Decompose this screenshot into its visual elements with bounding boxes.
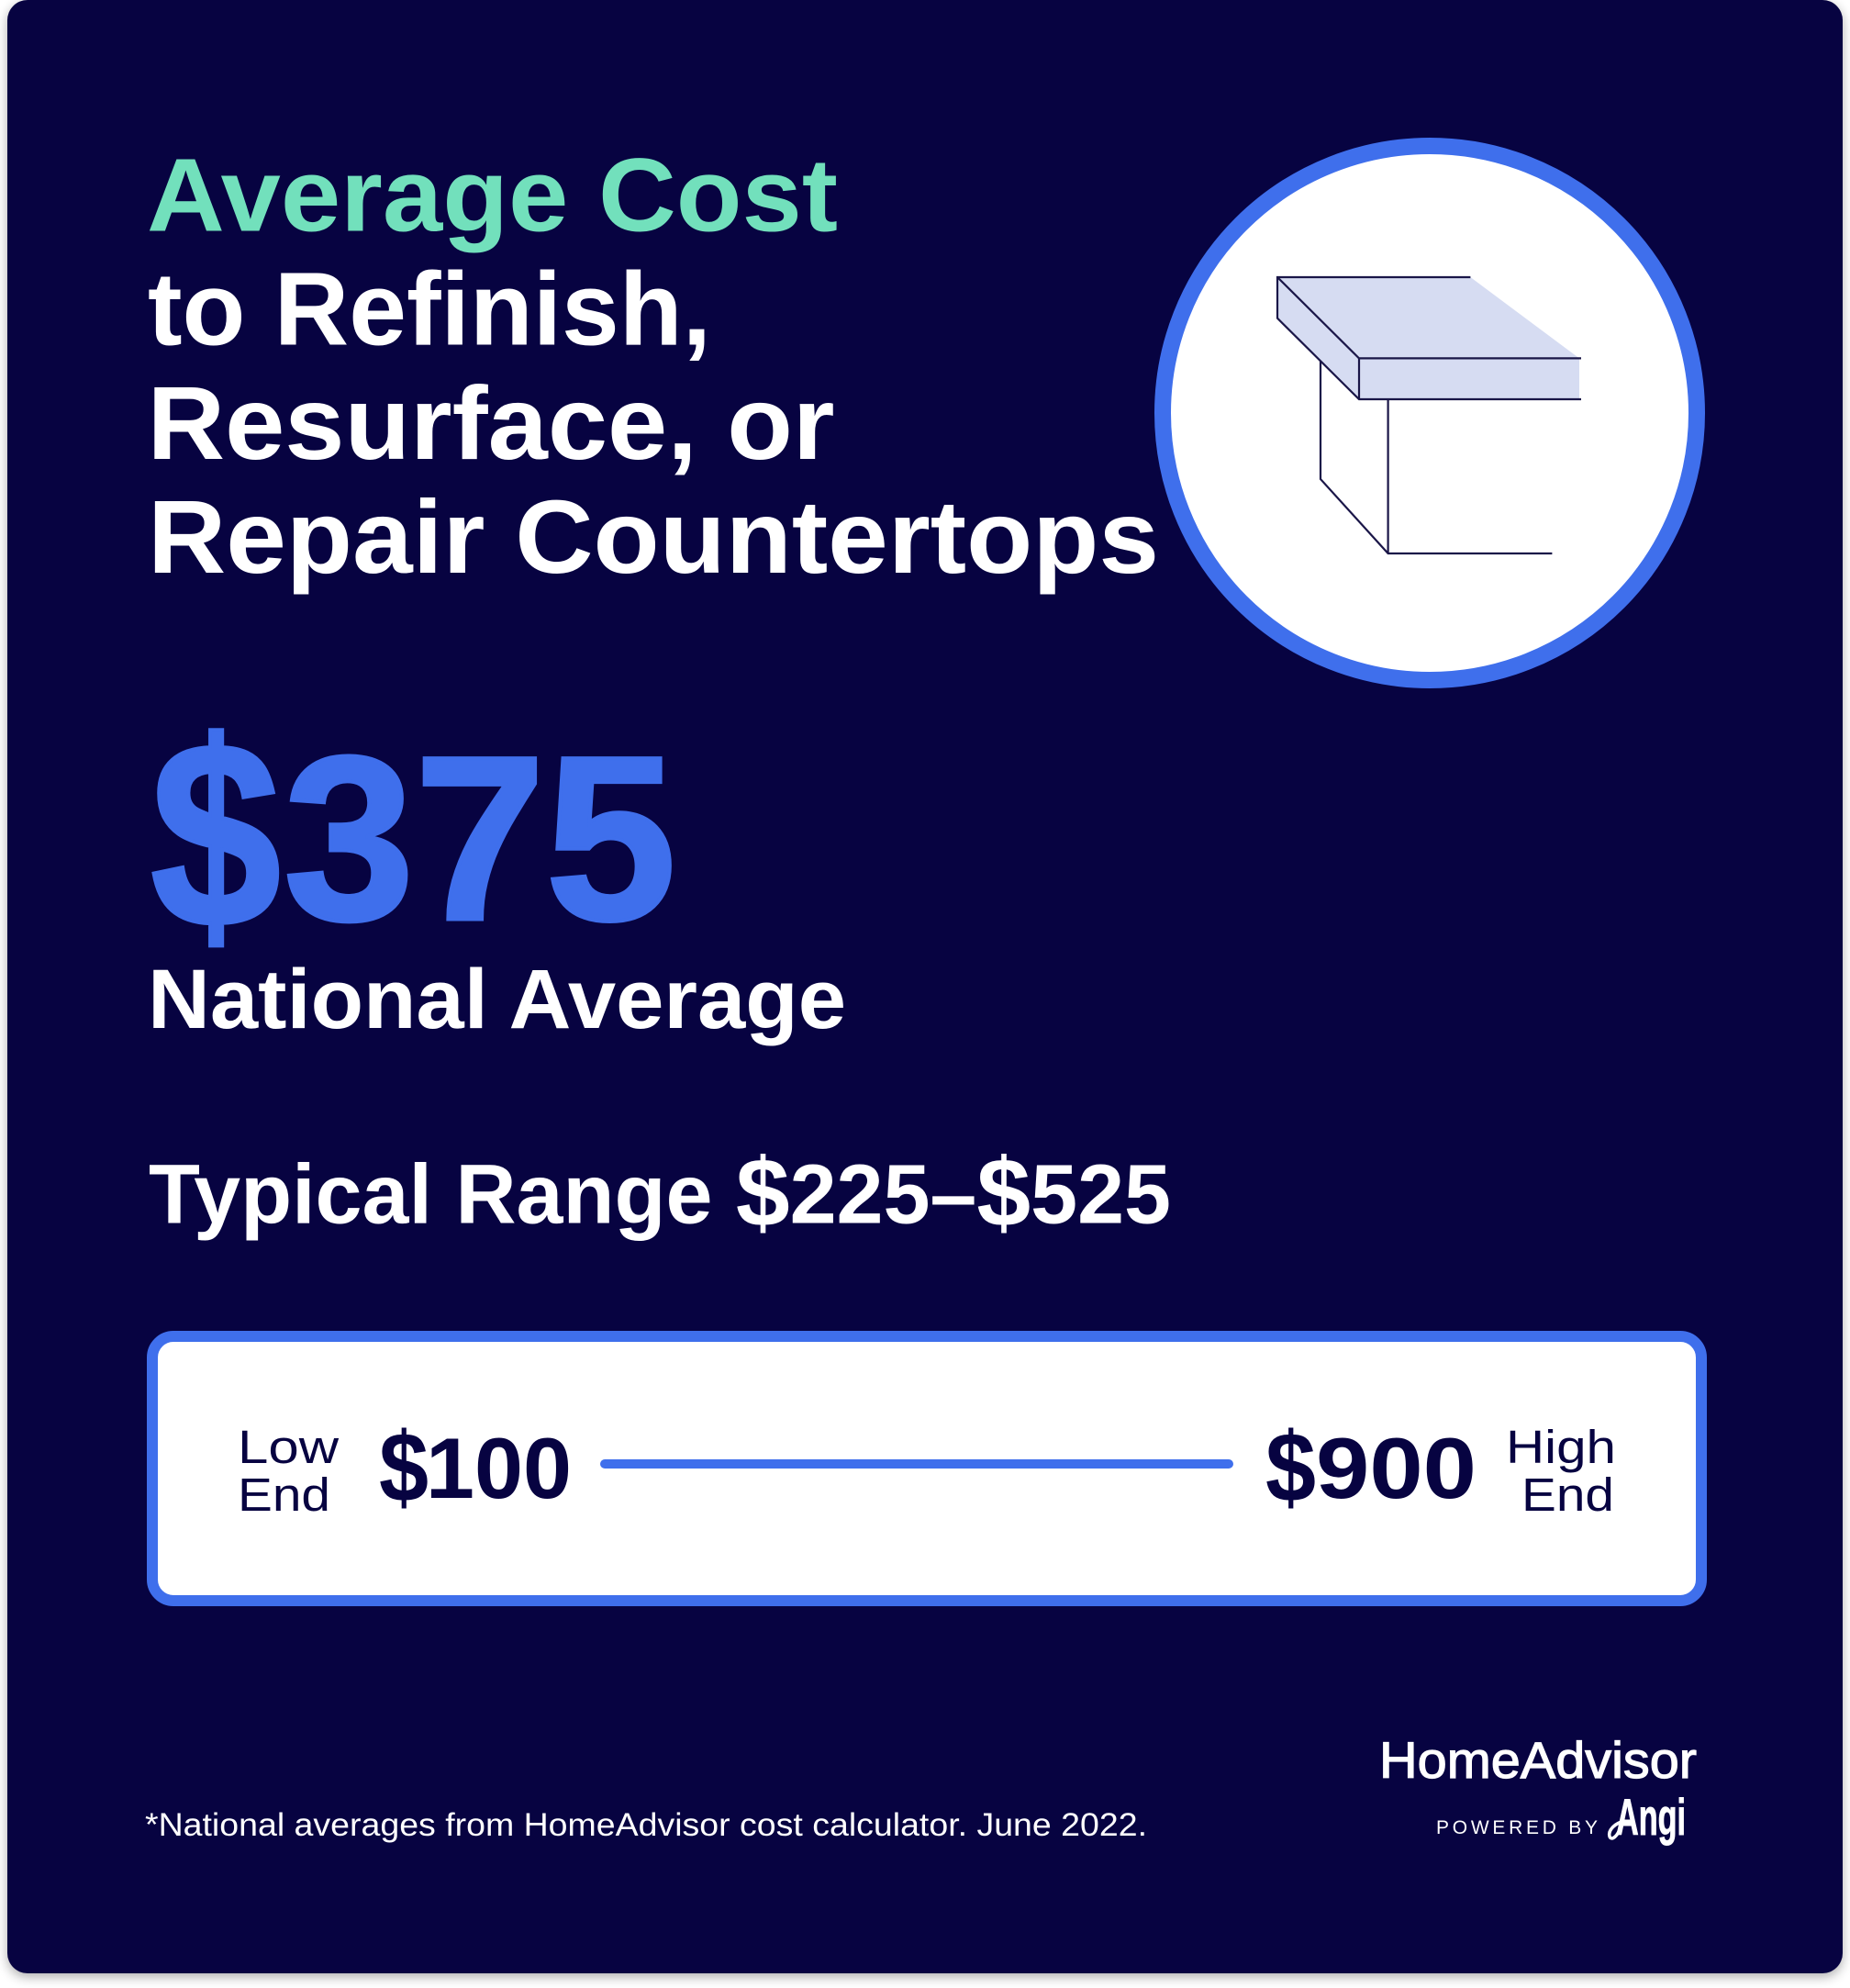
low end price: 100 bbox=[426, 1420, 572, 1516]
typical range: $ bbox=[976, 1138, 1031, 1246]
title: Resurface, or bbox=[147, 365, 835, 481]
low end price: $ bbox=[379, 1412, 429, 1522]
low end label bbox=[238, 1421, 339, 1521]
low end label: Low bbox=[238, 1421, 339, 1473]
low end label: End bbox=[238, 1469, 330, 1521]
logo: HomeAdvisor powered by Angi bbox=[1379, 1731, 1697, 1846]
icon: countertop in circle bbox=[1163, 146, 1697, 680]
title: to Refinish, bbox=[148, 251, 711, 367]
title bbox=[147, 138, 1159, 595]
logo: HomeAdvisor powered by Angi: Angi bbox=[1616, 1788, 1686, 1846]
typical range: $ bbox=[736, 1138, 790, 1246]
logo: HomeAdvisor powered by Angi: HomeAdvisor bbox=[1379, 1731, 1697, 1789]
high end price: $ bbox=[1265, 1412, 1316, 1522]
high end label bbox=[1506, 1421, 1616, 1521]
panel: low to high range bbox=[152, 1336, 1701, 1601]
footnote: *National averages from HomeAdvisor cost calculator. June 2022. bbox=[145, 1807, 1147, 1843]
national average price bbox=[150, 687, 676, 983]
high end price bbox=[1265, 1412, 1477, 1522]
title: Repair Countertops bbox=[148, 479, 1159, 595]
national average label: National Average bbox=[148, 953, 846, 1046]
typical range: 525 bbox=[1031, 1147, 1171, 1241]
high end price: 900 bbox=[1316, 1420, 1477, 1516]
low end price bbox=[379, 1412, 572, 1522]
high end label: End bbox=[1521, 1469, 1614, 1521]
national average price: 375 bbox=[284, 709, 676, 969]
typical range: 225– bbox=[790, 1147, 976, 1241]
range line bbox=[605, 1459, 1229, 1469]
title: Average Cost bbox=[147, 138, 838, 253]
national average price: $ bbox=[150, 687, 281, 983]
high end label: High bbox=[1506, 1421, 1616, 1473]
logo: HomeAdvisor powered by Angi: POWERED BY bbox=[1436, 1817, 1598, 1838]
typical range: Typical Range bbox=[149, 1147, 715, 1241]
